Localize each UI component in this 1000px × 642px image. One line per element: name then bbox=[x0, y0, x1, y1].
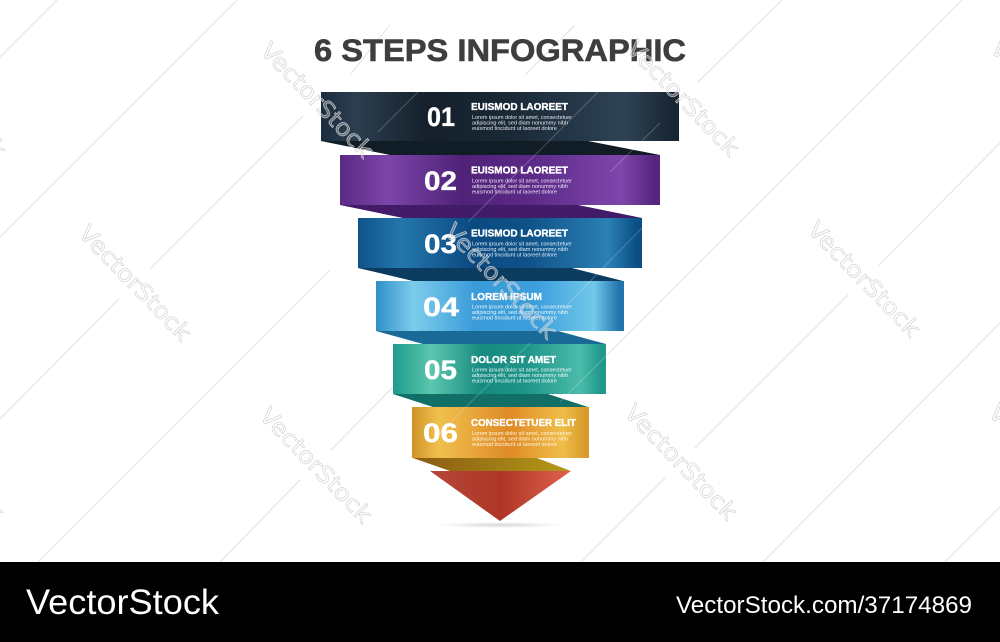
ground shadow bbox=[436, 522, 564, 528]
infographic canvas: VectorStock bbox=[802, 217, 925, 343]
infographic canvas: VectorStock bbox=[439, 219, 562, 345]
step 5 band bbox=[393, 344, 606, 394]
step 2 fold bbox=[340, 205, 642, 218]
step 5 band: 05 bbox=[424, 355, 457, 385]
step 4 fold bbox=[376, 331, 606, 344]
step 1 band: EUISMOD LAOREET bbox=[471, 102, 568, 113]
step 6 band bbox=[412, 407, 589, 458]
step 4 band: euismod tincidunt ut laoreet dolore bbox=[472, 316, 557, 322]
step 5 band: DOLOR SIT AMET bbox=[471, 355, 556, 366]
footer bar bbox=[0, 562, 1000, 642]
infographic canvas: VectorStock bbox=[255, 38, 378, 164]
step 6 band: Lorem ipsum dolor sit amet, consectetuer bbox=[472, 431, 572, 437]
funnel arrow tip bbox=[430, 471, 571, 521]
step 1 band: Lorem ipsum dolor sit amet, consectetuer bbox=[472, 115, 572, 121]
footer url: VectorStock.com/37174869 bbox=[676, 592, 972, 619]
step 5 band: Lorem ipsum dolor sit amet, consectetuer bbox=[472, 368, 572, 374]
step 2 band: Lorem ipsum dolor sit amet, consectetuer bbox=[472, 178, 572, 184]
step 2 band bbox=[340, 155, 660, 205]
step 6 fold bbox=[413, 458, 571, 471]
step 3 fold bbox=[358, 268, 623, 281]
step 4 band bbox=[376, 281, 624, 331]
step 3 band bbox=[358, 218, 642, 268]
title: 6 STEPS INFOGRAPHIC bbox=[314, 32, 686, 68]
step 3 band: Lorem ipsum dolor sit amet, consectetuer bbox=[472, 242, 572, 248]
step 6 band: CONSECTETUER ELIT bbox=[471, 418, 576, 429]
infographic canvas: VectorStock bbox=[254, 403, 377, 529]
step 3 band: adipiscing elit, sed diam nonummy nibh bbox=[472, 247, 568, 253]
step 1 band bbox=[321, 92, 679, 141]
step 4 band: LOREM IPSUM bbox=[471, 292, 542, 303]
step 1 fold bbox=[321, 141, 660, 155]
step 3 band: EUISMOD LAOREET bbox=[471, 228, 568, 240]
step 3 band: 03 bbox=[424, 229, 457, 259]
infographic canvas: VectorStock bbox=[621, 36, 744, 162]
step 1 band: 01 bbox=[427, 102, 455, 132]
step 1 band: adipiscing elit, sed diam nonummy nibh bbox=[472, 120, 568, 126]
step 5 fold bbox=[393, 394, 588, 407]
step 5 band: adipiscing elit, sed diam nonummy nibh bbox=[472, 373, 568, 379]
step 2 band: 02 bbox=[424, 166, 457, 196]
step 3 band: euismod tincidunt ut laoreet dolore bbox=[472, 252, 557, 258]
funnel diagram bbox=[321, 92, 679, 528]
step 6 band: euismod tincidunt ut laoreet dolore bbox=[472, 442, 557, 448]
infographic canvas: VectorStock bbox=[619, 400, 742, 526]
step 1 band: euismod tincidunt ut laoreet dolore bbox=[472, 126, 557, 132]
step 4 band: 04 bbox=[423, 292, 459, 322]
step 6 band: 06 bbox=[423, 418, 458, 448]
step 5 band: euismod tincidunt ut laoreet dolore bbox=[472, 378, 557, 384]
step 4 band: adipiscing elit, sed diam nonummy nibh bbox=[472, 310, 568, 316]
step 2 band: euismod tincidunt ut laoreet dolore bbox=[472, 190, 557, 196]
footer logo: VectorStock bbox=[26, 583, 220, 622]
step 6 band: adipiscing elit, sed diam nonummy nibh bbox=[472, 436, 568, 442]
step 4 band: Lorem ipsum dolor sit amet, consectetuer bbox=[472, 304, 572, 310]
step 2 band: adipiscing elit, sed diam nonummy nibh bbox=[472, 184, 568, 190]
step 2 band: EUISMOD LAOREET bbox=[471, 166, 568, 176]
infographic canvas: VectorStock bbox=[73, 221, 196, 347]
